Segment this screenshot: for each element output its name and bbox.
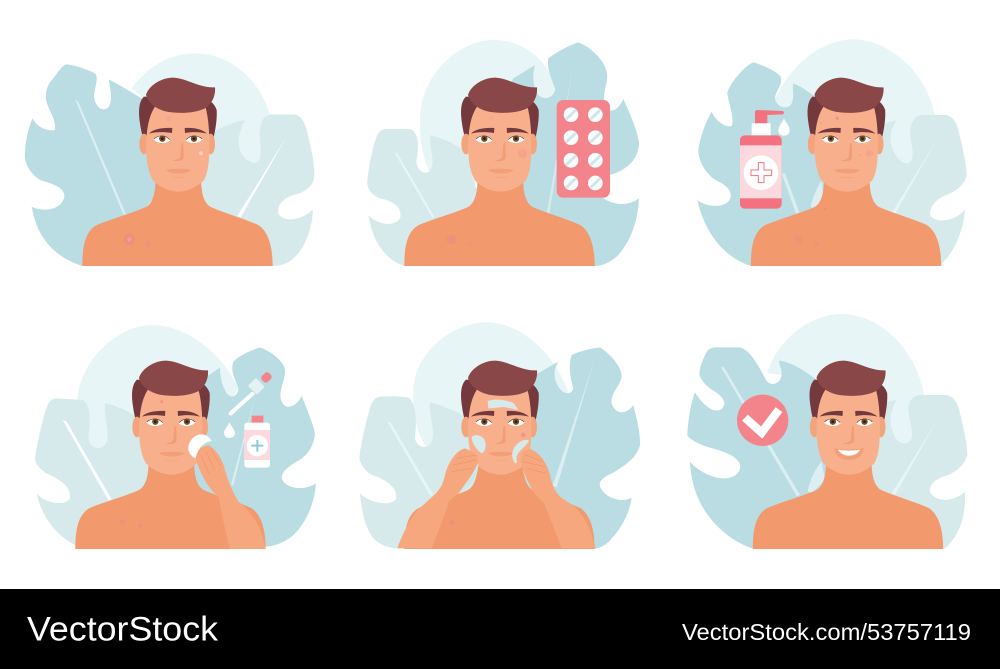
panel: pump bottle treatment bbox=[697, 39, 967, 266]
pill blister pack bbox=[557, 100, 610, 198]
acne spots bbox=[446, 116, 527, 246]
watermark banner bbox=[0, 589, 1000, 669]
leaf background bbox=[367, 40, 639, 266]
leaf background bbox=[697, 39, 967, 266]
acne spots bbox=[449, 433, 526, 525]
leaf background bbox=[359, 322, 640, 548]
leaf background bbox=[687, 314, 967, 549]
panel: clear skin result bbox=[687, 314, 967, 549]
acne spots bbox=[120, 400, 163, 528]
person bbox=[404, 361, 595, 549]
acne spots bbox=[794, 117, 873, 246]
person bbox=[404, 78, 595, 266]
person with acne bbox=[82, 78, 273, 266]
smiling person bbox=[753, 361, 943, 549]
cotton pad bbox=[188, 434, 212, 458]
check mark badge bbox=[737, 395, 788, 446]
pump bottle bbox=[740, 110, 790, 209]
arm and hand bbox=[195, 445, 266, 549]
serum bottle bbox=[244, 416, 270, 468]
leaf background bbox=[35, 325, 316, 547]
panel: acne before treatment bbox=[25, 53, 314, 266]
brand name: VectorStock bbox=[27, 610, 219, 648]
panel: foam cleansing bbox=[359, 322, 640, 549]
foam on face bbox=[472, 400, 529, 463]
person bbox=[751, 78, 941, 266]
image id: VectorStock.com/53757119 bbox=[682, 619, 971, 645]
neck gaps bbox=[460, 463, 533, 492]
panel: pills treatment bbox=[367, 40, 639, 266]
panel: cotton pad and serum bbox=[35, 325, 316, 549]
acne spots bbox=[124, 115, 203, 247]
smile bbox=[834, 448, 864, 460]
leaf background bbox=[25, 53, 314, 266]
left arm and hand bbox=[397, 448, 478, 548]
person bbox=[75, 361, 266, 549]
serum dropper bbox=[224, 371, 273, 438]
right arm and hand bbox=[521, 449, 596, 548]
